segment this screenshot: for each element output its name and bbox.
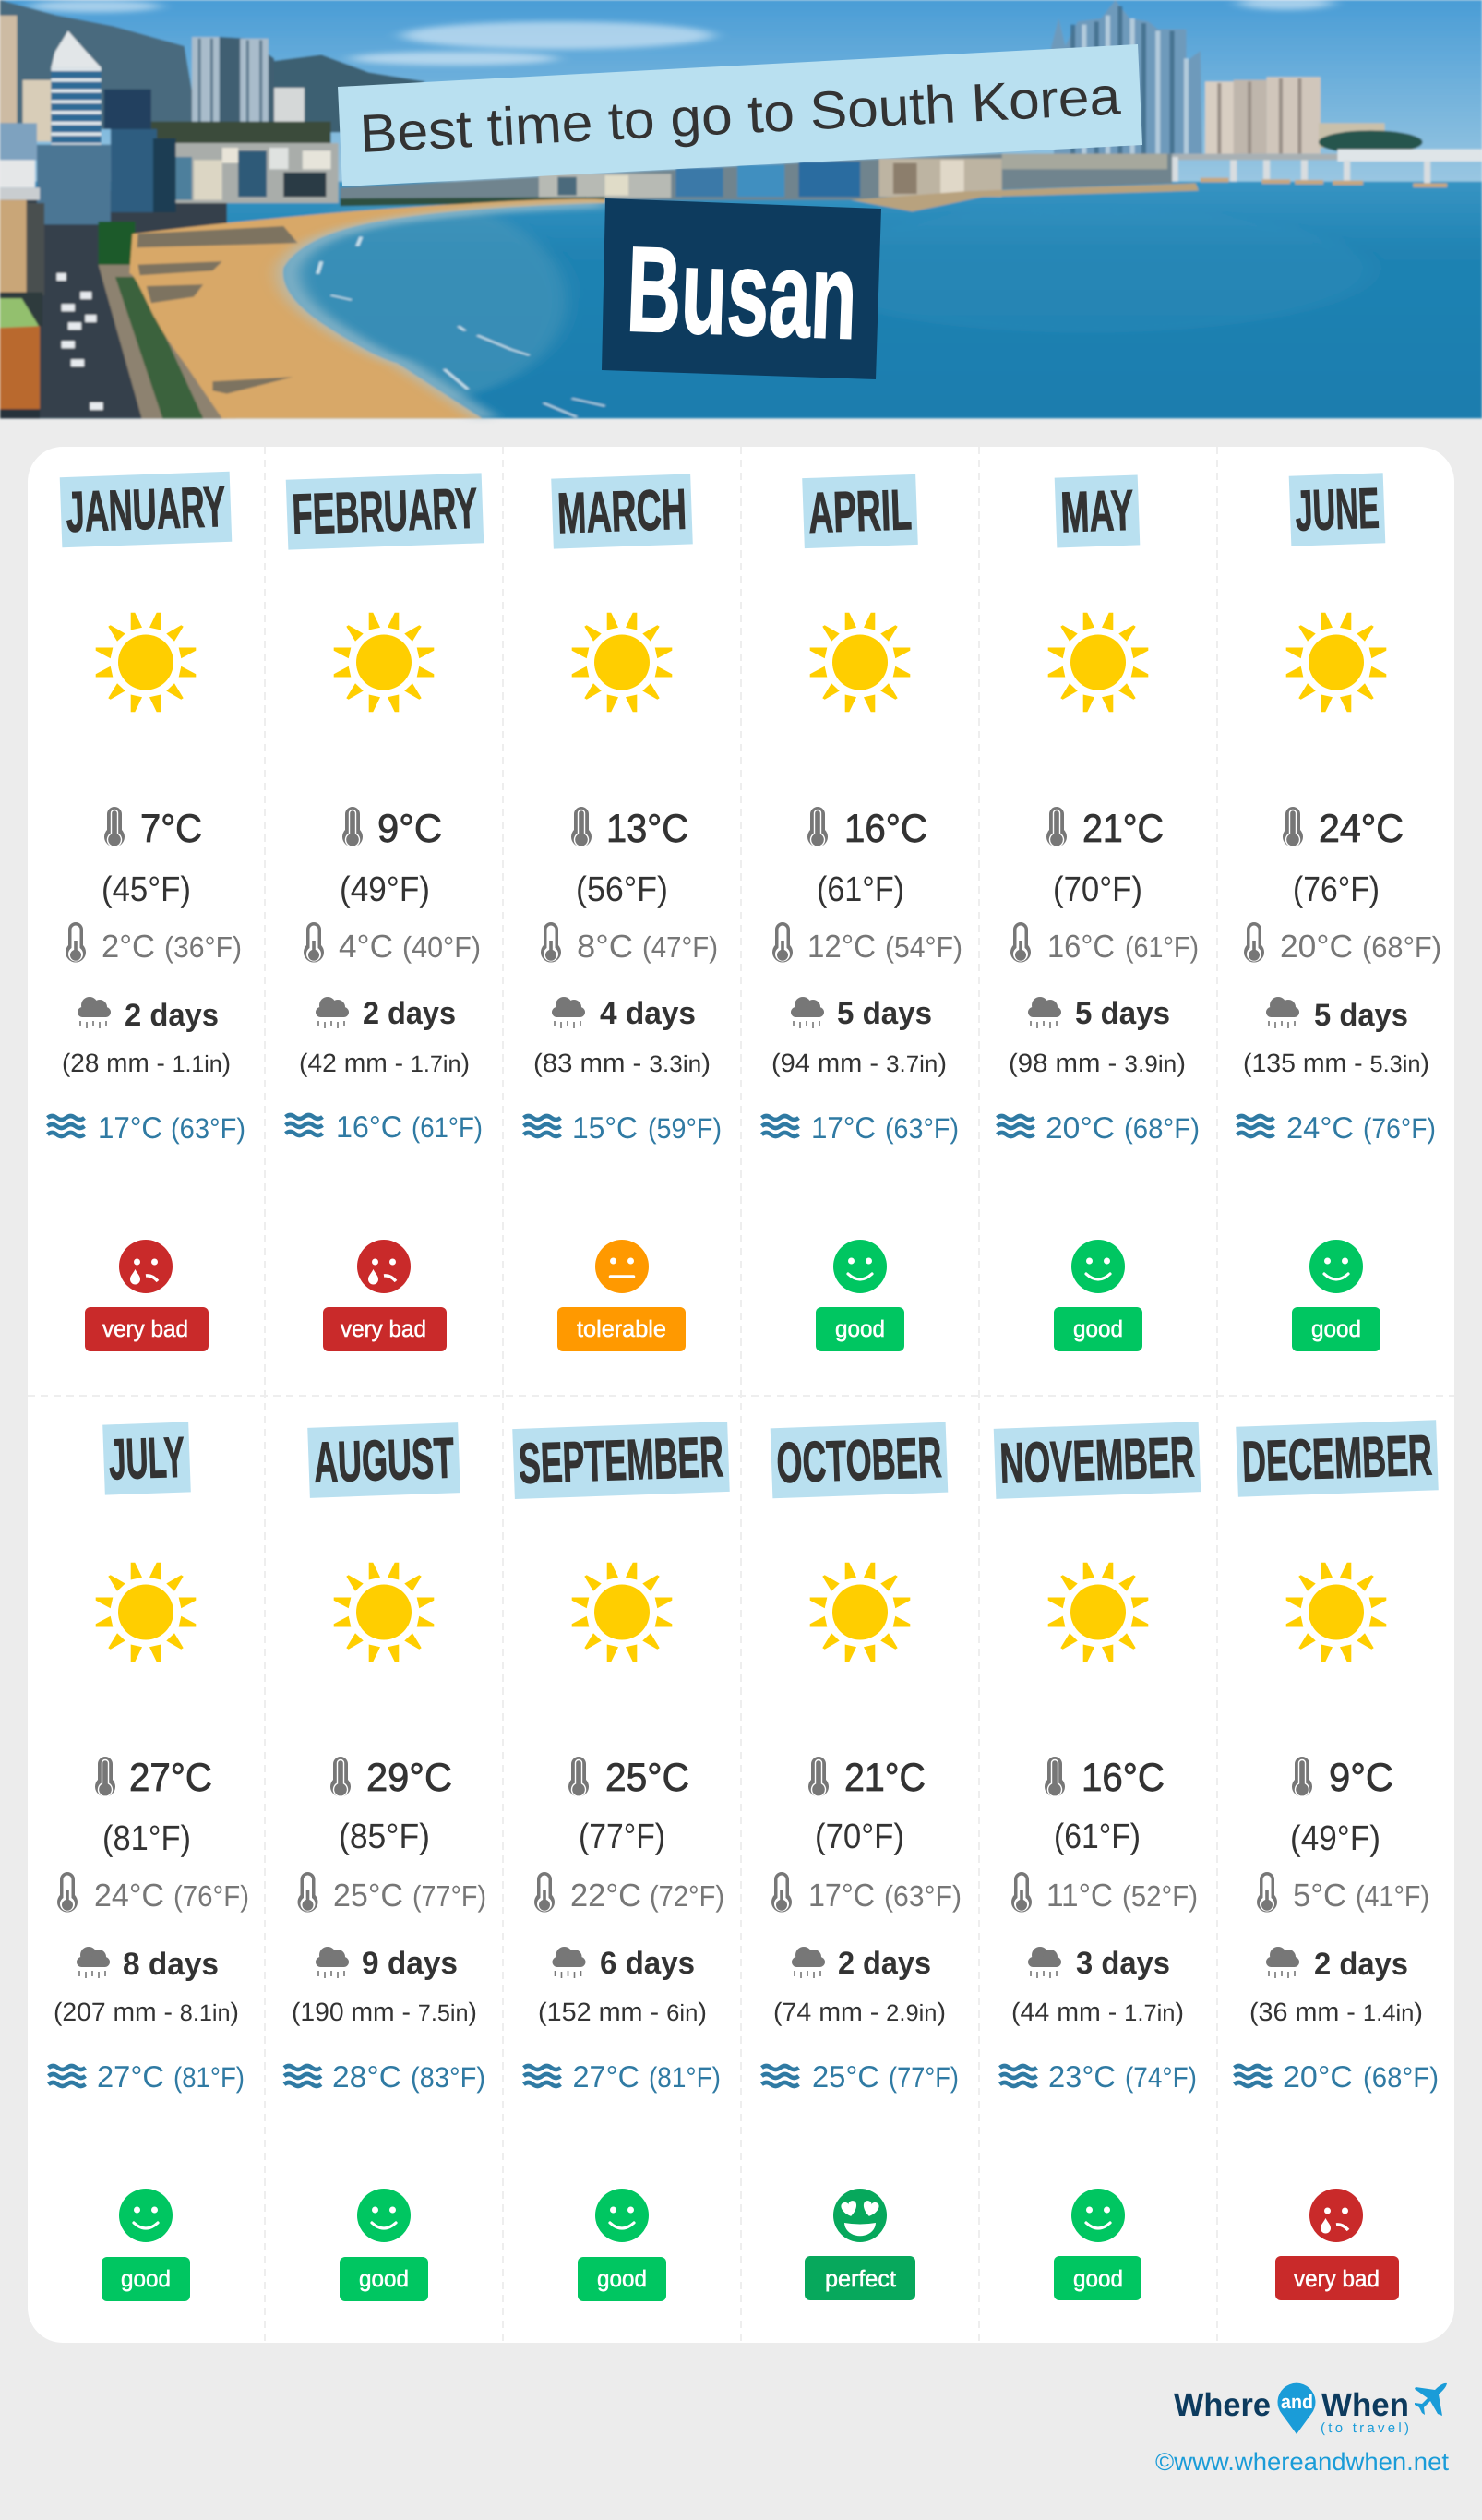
panel: May	[997, 474, 1200, 1351]
icon: rain cloud	[552, 1947, 585, 1978]
heading: October: OCTOBER	[775, 1426, 943, 1495]
rainfall: (42 mm - 1.7in)	[299, 1049, 470, 1077]
icon: sea waves	[762, 2066, 799, 2086]
low temperature: (68°F)	[1362, 930, 1441, 964]
sea temperature: (77°F)	[889, 2061, 959, 2094]
title banner: Best time to go to South Korea	[358, 66, 1122, 164]
sea temperature	[812, 2059, 959, 2094]
average temperature: 27°C	[129, 1756, 212, 1800]
sea temperature	[1283, 2059, 1439, 2094]
icon: low thermometer	[534, 1872, 555, 1913]
low temperature: 4°C	[339, 929, 393, 965]
icon: rating face	[833, 1240, 887, 1293]
icon: rain cloud	[1028, 1947, 1061, 1978]
city name block	[602, 198, 881, 379]
average temperature: 16°C	[844, 807, 927, 851]
icon: rain cloud	[316, 997, 349, 1028]
icon: thermometer	[808, 1757, 829, 1797]
rating badge	[1275, 2256, 1399, 2300]
sea temperature: 17°C	[98, 1110, 162, 1145]
average temperature: 29°C	[366, 1756, 452, 1800]
icon: rating face	[1071, 1240, 1125, 1293]
rating badge: very bad	[1294, 2266, 1380, 2292]
header photo: Busan beach and skyline	[0, 0, 1482, 418]
sea temperature: 15°C	[572, 1110, 638, 1145]
icon: thermometer	[571, 807, 592, 847]
rainfall: (28 mm - 1.1in)	[62, 1049, 231, 1077]
icon: thermometer	[330, 1757, 351, 1797]
rainy days: 8 days	[123, 1947, 219, 1982]
low temperature: (76°F)	[173, 1879, 249, 1913]
sea temperature: (61°F)	[412, 1111, 483, 1144]
rainy days: 2 days	[838, 1946, 931, 1981]
title banner	[338, 44, 1142, 186]
rating badge: tolerable	[577, 1316, 666, 1342]
heading: August	[307, 1422, 460, 1498]
icon: sun	[1048, 613, 1148, 712]
sea temperature: 23°C	[1048, 2059, 1116, 2094]
icon: sun	[810, 1563, 910, 1662]
low temperature: 16°C	[1047, 929, 1115, 965]
icon: rain cloud	[1266, 997, 1299, 1028]
rainfall: (135 mm - 5.3in)	[1243, 1049, 1429, 1077]
panel: November	[994, 1422, 1201, 2300]
low temperature	[1293, 1878, 1429, 1914]
rating badge	[816, 1307, 904, 1351]
heading: February	[286, 473, 484, 550]
average temperature: 7°C	[140, 807, 202, 851]
low temperature	[333, 1878, 486, 1914]
rating badge	[1054, 2256, 1141, 2300]
sea temperature: 16°C	[336, 1110, 402, 1144]
icon: low thermometer	[771, 1872, 792, 1913]
icon: rain cloud	[77, 1947, 110, 1978]
low temperature: (72°F)	[650, 1879, 724, 1913]
sea temperature	[1048, 2059, 1197, 2094]
icon: sun	[1286, 1563, 1386, 1662]
temperature in fahrenheit: (49°F)	[340, 870, 430, 909]
icon: rain cloud	[316, 1947, 349, 1978]
icon: thermometer	[104, 807, 125, 847]
rainy days: 2 days	[1314, 1947, 1408, 1982]
sea temperature: 24°C	[1286, 1110, 1354, 1145]
low temperature: 20°C	[1280, 929, 1353, 965]
sea temperature: 28°C	[332, 2059, 401, 2094]
temperature in fahrenheit: (70°F)	[815, 1818, 904, 1856]
icon: rating face	[1309, 2189, 1363, 2242]
main card	[28, 447, 1454, 2343]
rainfall: (190 mm - 7.5in)	[292, 1998, 477, 2026]
rating badge	[85, 1307, 209, 1351]
icon: rating face	[357, 2189, 411, 2242]
icon: rain cloud	[791, 997, 824, 1028]
rating badge: good	[1311, 1316, 1361, 1342]
low temperature: (41°F)	[1356, 1879, 1429, 1913]
low temperature: (47°F)	[642, 930, 718, 964]
icon: low thermometer	[304, 922, 324, 963]
sea temperature: 27°C	[97, 2059, 164, 2094]
heading: January	[60, 472, 232, 547]
sea temperature	[572, 2059, 721, 2094]
panel: March	[524, 474, 722, 1351]
temperature in fahrenheit: (49°F)	[1290, 1819, 1380, 1858]
sea temperature	[572, 1110, 722, 1145]
rainy days: 3 days	[1076, 1946, 1170, 1981]
rainfall: (94 mm - 3.7in)	[771, 1049, 947, 1077]
icon: sun	[1048, 1563, 1148, 1662]
low temperature	[94, 1878, 249, 1914]
icon: low thermometer	[1011, 1872, 1032, 1913]
sea temperature: (68°F)	[1124, 1112, 1200, 1145]
rainfall: (207 mm - 8.1in)	[54, 1998, 239, 2026]
sea temperature: 20°C	[1046, 1110, 1115, 1145]
sea temperature: (74°F)	[1125, 2061, 1197, 2094]
panel: June	[1237, 473, 1441, 1351]
heading: March: MARCH	[556, 478, 687, 546]
icon: rating face	[119, 2189, 173, 2242]
icon: sea waves	[286, 1115, 323, 1135]
rainy days: 2 days	[125, 998, 219, 1033]
sea temperature: 20°C	[1283, 2059, 1353, 2094]
heading: September	[512, 1422, 730, 1499]
low temperature	[808, 1878, 962, 1914]
heading: July	[102, 1422, 191, 1495]
icon: sun	[572, 613, 672, 712]
low temperature	[102, 929, 242, 965]
sea temperature: (81°F)	[173, 2061, 245, 2094]
temperature in fahrenheit: (85°F)	[339, 1818, 430, 1856]
heading: January: JANUARY	[65, 475, 227, 545]
heading: August: AUGUST	[313, 1426, 455, 1495]
icon: low thermometer	[1010, 922, 1031, 963]
low temperature: 11°C	[1046, 1878, 1113, 1914]
rainy days: 5 days	[837, 996, 932, 1031]
low temperature: 24°C	[94, 1878, 164, 1914]
rating badge: good	[1073, 1316, 1123, 1342]
temperature in fahrenheit: (70°F)	[1053, 870, 1142, 909]
sea temperature: 17°C	[811, 1110, 876, 1145]
low temperature: (52°F)	[1122, 1879, 1198, 1913]
sea temperature: (63°F)	[171, 1112, 245, 1145]
icon: map pin	[1277, 2383, 1316, 2434]
icon: rating face	[119, 1240, 173, 1293]
heading: March	[551, 474, 693, 549]
icon: thermometer	[1283, 807, 1303, 847]
sea temperature	[336, 1110, 483, 1144]
icon: rain cloud	[1028, 997, 1061, 1028]
temperature in fahrenheit: (61°F)	[817, 870, 904, 909]
rating badge: very bad	[341, 1316, 426, 1342]
rainy days: 6 days	[600, 1946, 695, 1981]
icon: low thermometer	[1257, 1872, 1277, 1913]
average temperature: 9°C	[1329, 1756, 1393, 1800]
temperature in fahrenheit: (56°F)	[576, 870, 668, 909]
icon: low thermometer	[66, 922, 86, 963]
average temperature: 21°C	[1082, 807, 1164, 851]
heading: September: SEPTEMBER	[518, 1425, 724, 1496]
rainfall: (74 mm - 2.9in)	[773, 1998, 946, 2026]
heading: April: APRIL	[807, 478, 913, 546]
rainfall: (83 mm - 3.3in)	[533, 1049, 711, 1077]
icon: rain cloud	[552, 997, 585, 1028]
icon: rating face	[595, 1240, 649, 1293]
icon: rating face	[1309, 1240, 1363, 1293]
icon: thermometer	[568, 1757, 589, 1797]
rating badge	[323, 1307, 447, 1351]
heading: June	[1289, 473, 1385, 546]
icon: thermometer	[95, 1757, 115, 1797]
icon: sun	[96, 613, 196, 712]
low temperature	[339, 929, 481, 965]
rating badge	[340, 2257, 428, 2301]
icon: rain cloud	[792, 1947, 825, 1978]
icon: thermometer	[807, 807, 828, 847]
logo: Where and When: and	[1281, 2392, 1313, 2413]
copyright url: ©www.whereandwhen.net	[1155, 2448, 1449, 2476]
low temperature	[1046, 1878, 1198, 1914]
sea temperature: (83°F)	[411, 2061, 485, 2094]
rating badge: good	[835, 1316, 885, 1342]
sea temperature: (63°F)	[885, 1112, 959, 1145]
heading: July: JULY	[108, 1426, 185, 1492]
icon: sea waves	[48, 2066, 85, 2086]
rainfall: (98 mm - 3.9in)	[1009, 1049, 1186, 1077]
logo: Where and When: (to travel)	[1321, 2420, 1409, 2436]
heading: November	[994, 1422, 1201, 1499]
average temperature: 13°C	[606, 807, 688, 851]
heading: October	[771, 1422, 948, 1498]
heading: April	[802, 474, 918, 548]
logo: Where and When: Where	[1174, 2387, 1271, 2423]
icon: rating face	[357, 1240, 411, 1293]
icon: thermometer	[342, 807, 363, 847]
sea temperature: 27°C	[572, 2059, 639, 2094]
icon: sun	[334, 613, 434, 712]
average temperature: 16°C	[1082, 1756, 1165, 1800]
sea temperature: (81°F)	[649, 2061, 721, 2094]
rainfall: (44 mm - 1.7in)	[1011, 1998, 1184, 2026]
icon: sea waves	[48, 1116, 85, 1136]
low temperature	[1280, 929, 1441, 965]
sea temperature	[98, 1110, 245, 1145]
icon: sea waves	[1237, 1116, 1273, 1136]
panel: April	[762, 474, 962, 1351]
icon: low thermometer	[541, 922, 561, 963]
icon: rain cloud	[78, 997, 111, 1028]
rainfall: (152 mm - 6in)	[538, 1998, 707, 2026]
icon: sea waves	[524, 1116, 561, 1136]
heading: February: FEBRUARY	[291, 477, 479, 546]
icon: rating face	[595, 2189, 649, 2242]
city name block: Busan	[625, 221, 859, 365]
logo: Where and When	[1174, 2383, 1447, 2436]
icon: sea waves	[762, 1116, 799, 1136]
rainfall: (36 mm - 1.4in)	[1249, 1998, 1423, 2026]
sea temperature	[97, 2059, 245, 2094]
low temperature	[570, 1878, 724, 1914]
low temperature: 22°C	[570, 1878, 641, 1914]
icon: thermometer	[1292, 1757, 1312, 1797]
rainy days: 5 days	[1314, 998, 1408, 1033]
rainy days: 2 days	[363, 996, 456, 1031]
sea temperature: 25°C	[812, 2059, 879, 2094]
low temperature: 25°C	[333, 1878, 403, 1914]
icon: sea waves	[1000, 2066, 1037, 2086]
low temperature: 17°C	[808, 1878, 875, 1914]
rating badge: good	[359, 2266, 409, 2292]
icon: sun	[96, 1563, 196, 1662]
rainy days: 9 days	[362, 1946, 458, 1981]
panel: July	[48, 1422, 249, 2301]
panel: October	[762, 1422, 962, 2300]
heading: November: NOVEMBER	[998, 1425, 1196, 1496]
heading: May	[1055, 474, 1140, 548]
icon: sun	[1286, 613, 1386, 712]
icon: rain cloud	[1266, 1947, 1299, 1978]
panel: August	[284, 1422, 486, 2301]
low temperature: (36°F)	[164, 930, 242, 964]
low temperature: (40°F)	[402, 930, 481, 964]
sea temperature	[1046, 1110, 1200, 1145]
low temperature: 2°C	[102, 929, 155, 965]
low temperature	[1047, 929, 1199, 965]
average temperature: 25°C	[605, 1756, 689, 1800]
icon: sun	[810, 613, 910, 712]
rating badge: good	[597, 2266, 647, 2292]
temperature in fahrenheit: (61°F)	[1054, 1818, 1141, 1856]
sea temperature	[1286, 1110, 1436, 1145]
low temperature	[807, 929, 962, 965]
icon: sea waves	[1235, 2066, 1272, 2086]
rating badge	[805, 2256, 915, 2300]
average temperature: 9°C	[377, 807, 442, 851]
low temperature: (54°F)	[885, 930, 962, 964]
temperature in fahrenheit: (76°F)	[1293, 870, 1380, 909]
low temperature: (61°F)	[1125, 930, 1199, 964]
temperature in fahrenheit: (45°F)	[102, 870, 191, 909]
low temperature: 12°C	[807, 929, 876, 965]
rating badge: good	[121, 2266, 171, 2292]
rainy days: 4 days	[600, 996, 696, 1031]
temperature in fahrenheit: (77°F)	[579, 1818, 665, 1856]
low temperature: (63°F)	[884, 1879, 962, 1913]
icon: thermometer	[1046, 807, 1067, 847]
low temperature	[577, 929, 718, 965]
icon: sun	[334, 1563, 434, 1662]
icon: rating face	[833, 2189, 887, 2242]
icon: low thermometer	[1244, 922, 1264, 963]
rating badge: perfect	[825, 2266, 896, 2292]
rating badge	[102, 2257, 190, 2301]
icon: low thermometer	[772, 922, 793, 963]
panel: January	[48, 472, 245, 1351]
icon: sea waves	[524, 2066, 561, 2086]
average temperature: 21°C	[844, 1756, 926, 1800]
low temperature: (77°F)	[412, 1879, 486, 1913]
temperature in fahrenheit: (81°F)	[102, 1819, 191, 1858]
heading: May: MAY	[1059, 479, 1135, 545]
rating badge: good	[1073, 2266, 1123, 2292]
logo: Where and When: When	[1321, 2387, 1409, 2423]
sea temperature: (59°F)	[648, 1112, 722, 1145]
icon: sea waves	[997, 1116, 1034, 1136]
icon: rating face	[1071, 2189, 1125, 2242]
rainy days: 5 days	[1075, 996, 1170, 1031]
icon: thermometer	[1045, 1757, 1065, 1797]
rating badge	[1054, 1307, 1142, 1351]
rating badge	[578, 2257, 666, 2301]
rating badge	[557, 1307, 686, 1351]
low temperature: 5°C	[1293, 1878, 1346, 1914]
rating badge	[1292, 1307, 1380, 1351]
icon: low thermometer	[57, 1872, 78, 1913]
sea temperature	[811, 1110, 959, 1145]
heading: June: JUNE	[1294, 476, 1380, 544]
icon: low thermometer	[297, 1872, 317, 1913]
sea temperature	[332, 2059, 485, 2094]
low temperature: 8°C	[577, 929, 633, 965]
icon: sea waves	[284, 2066, 321, 2086]
sea temperature: (76°F)	[1363, 1112, 1436, 1145]
icon: plane	[1415, 2383, 1447, 2416]
panel: September	[512, 1422, 730, 2301]
average temperature: 24°C	[1319, 807, 1404, 851]
sea temperature: (68°F)	[1363, 2061, 1439, 2094]
icon: sun	[572, 1563, 672, 1662]
rating badge: very bad	[102, 1316, 188, 1342]
panel: February	[286, 473, 484, 1351]
panel: December	[1235, 1420, 1439, 2300]
